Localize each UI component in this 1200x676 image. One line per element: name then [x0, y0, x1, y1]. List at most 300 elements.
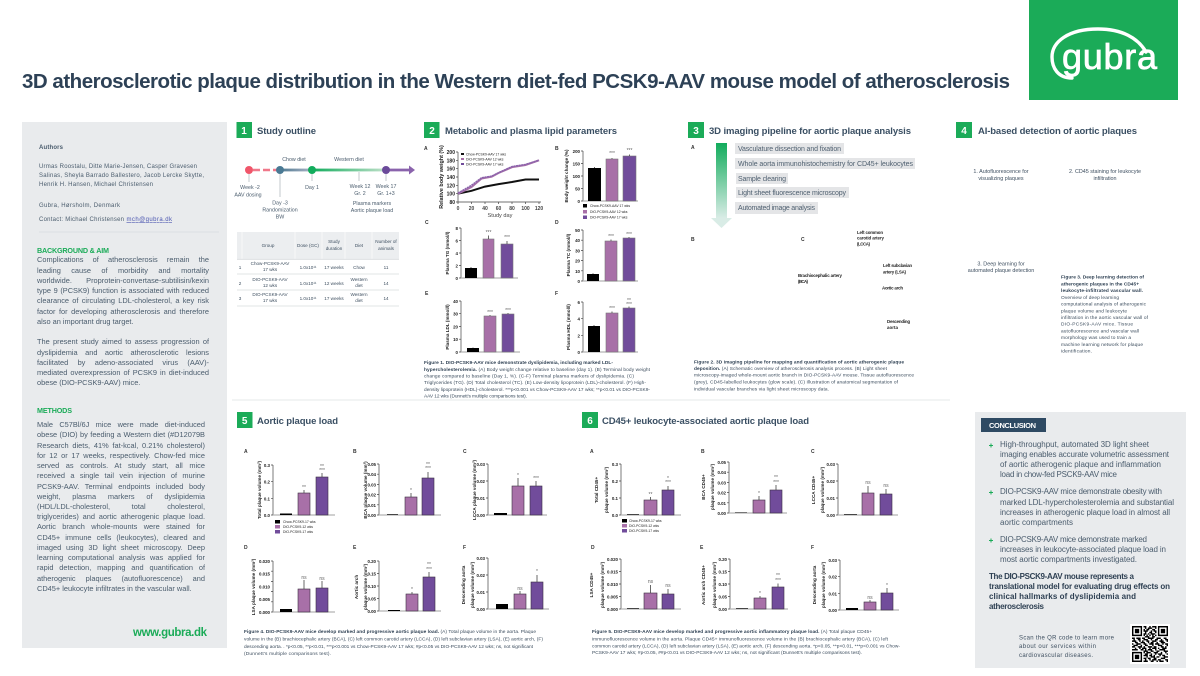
anatomical labels: (BCA) [798, 279, 809, 284]
text: methods: triglycerides) and aortic atherogenic plaque load. [37, 512, 205, 521]
chart A: body weight curve: 100 [521, 206, 530, 212]
chart A: body weight curve: Chow-PCSK9-AAV 17 wks [466, 152, 506, 156]
chart 5B: 0.04 [367, 472, 377, 477]
chart 5C: 0.00 [476, 513, 486, 518]
chart 6F: 0.01 [828, 591, 838, 596]
pipeline steps: Vasculature dissection and fixation [738, 146, 841, 153]
chart B: body weight change: *** [627, 148, 632, 154]
panel 5: aortic plaque load [237, 412, 549, 657]
timeline: Week 17 [376, 184, 396, 190]
caption: figure 5 [592, 629, 900, 656]
chart 6F: Descending aorta [812, 565, 817, 604]
caption: figure 5: common carotid artery (LCCA), (D) left subclavian artery (LSA), (E) aortic arch, (F) descending aorta. *p<0.05, **p<0.01, ***p<0.001 vs Chow- [592, 644, 900, 650]
table: study groups: diet [355, 298, 363, 303]
timeline: Gr. 2 [354, 191, 366, 197]
heading 2: Metabolic and plasma lipid parameters [445, 126, 617, 137]
chart 5F: 0.01 [476, 590, 486, 595]
chart C: plasma TG: Plasma TG (mmol/l) [445, 231, 450, 274]
caption: figure 4 [244, 629, 543, 657]
QR call to action: about our services within [1019, 644, 1096, 650]
chart 6F: 0.00 [828, 608, 838, 613]
image labels: 1. Autofluorescence for [973, 169, 1029, 175]
chart 5E: 0.10 [367, 584, 377, 589]
chart 5D: 0.010 [259, 584, 271, 590]
text: methods: obese (DIO) by feeding a Western diet (#D12079B [37, 430, 205, 439]
chart 6D: 0.005 [607, 594, 619, 600]
QR call to action: cardiovascular diseases. [1019, 653, 1093, 659]
chart 6B: *** [773, 480, 779, 486]
website link: www.gubra.dk [132, 627, 208, 639]
chart C: plasma TG: *** [486, 230, 491, 236]
chart 6E: * [759, 591, 761, 597]
chart 5F: * [536, 569, 538, 575]
arrow: pipeline direction [711, 143, 732, 228]
chart 5E: plaque volume (mm³) [363, 563, 368, 610]
heading: background and aim: BACKGROUND & AIM [37, 246, 109, 255]
panel 3: 3D imaging pipeline [688, 122, 915, 392]
text: background: clearance of circulating LDL-cholesterol, a key risk [37, 296, 209, 305]
image labels: visualizing plaques [978, 176, 1024, 182]
chart 6A: 0.3 [612, 462, 619, 467]
chart 6A: Total CD45+ [594, 477, 599, 503]
chart 6B: 0.01 [717, 501, 727, 506]
image labels: automated plaque detection [968, 268, 1034, 274]
chart 6E: Aortic arch CD45+ [701, 565, 706, 605]
chart 6A [590, 449, 681, 533]
chart 6F: ns [867, 595, 873, 601]
caption: figure 3: DIO-PCSK9-AAV mice. Tissue [1061, 322, 1133, 328]
pipeline steps [735, 143, 915, 214]
text: background: dyslipidemia and aortic atherosclerotic lesions [37, 348, 209, 357]
chart B: body weight change [555, 146, 638, 220]
panel: conclusion [975, 412, 1186, 668]
timeline: Chow diet [282, 157, 306, 163]
chart 6F: F [811, 545, 814, 551]
chart 5B: ** [426, 462, 430, 468]
chart D: plasma TC: 10 [575, 269, 581, 274]
anatomical labels: (LCCA) [857, 242, 871, 246]
caption: figure 3: leukocyte-infiltrated vascular wall. [1061, 288, 1143, 294]
chart F: plasma HDL [555, 291, 638, 355]
chart 5B: BCA plaque volume (mm³) [363, 461, 368, 519]
text: background: type 9 (PCSK9) function is associated with reduced [37, 286, 209, 295]
chart 6B [701, 449, 787, 516]
chart D: plasma TC [555, 220, 638, 284]
chart 5F: 0.02 [476, 573, 486, 578]
chart 5E [353, 545, 441, 614]
chart 6C: ns [883, 483, 889, 489]
chart 6A: ** [649, 492, 652, 498]
chart 5F: plaque volume (mm³) [470, 561, 475, 608]
chart 5A: 0.0 [264, 513, 271, 518]
chart 5D: 0.000 [259, 610, 271, 615]
chart 6C [811, 449, 898, 518]
chart A: body weight curve: 100 [447, 192, 455, 198]
caption: figure 2: Figure 2. 3D imaging pipeline for mapping and quantification of aortic atherogenic plaque [694, 360, 904, 366]
chart 6B: plaque volume (mm³) [710, 463, 715, 510]
panel 3: 3D imaging pipeline: B [691, 237, 695, 243]
heading 2 [424, 122, 617, 138]
authors block [39, 145, 204, 223]
chart 6C: 0.03 [826, 462, 836, 467]
chart 5B [353, 449, 441, 519]
chart F: plasma HDL: 4 [578, 317, 581, 322]
caption: figure 5: PCSK9-AAV 17 wks; #p<0.05, ##p<0.01 vs DIO-PCSK9-AAV 12 wks; ns, not significant (Dunnett's multiple comparisons test). [592, 650, 862, 656]
chart 5A: ** [302, 485, 306, 491]
chart E: plasma LDL: 30 [453, 312, 459, 317]
chart 6C: ns [865, 480, 871, 486]
chart 6D: 0.015 [607, 570, 619, 574]
chart C: plasma TG [425, 220, 518, 281]
caption: figure 4: (Dunnett's multiple comparisons test). [244, 651, 331, 657]
chart 6A: Chow-PCSK9-17 wks [629, 519, 662, 523]
anatomical labels: Brachiocephalic artery [798, 273, 843, 278]
caption: figure 4: Figure 4. DIO-PCSK9-AAV mice develop marked and progressive aortic plaque load. (A) Total plaque volume in the aorta. Plaque [244, 629, 536, 635]
text: methods: CD45+ leukocyte infiltrates in the vascular wall. [37, 584, 192, 593]
chart 6E [700, 545, 788, 612]
table: study groups: 2 [239, 281, 242, 286]
chart 6C: 0.02 [826, 479, 836, 484]
bullet 1 [989, 440, 1170, 479]
pipeline steps: Automated image analysis [738, 205, 816, 212]
timeline: Week 12 [350, 184, 370, 190]
chart 5E: 0.15 [367, 572, 377, 576]
caption: figure 3 [1061, 275, 1149, 354]
chart 5A: 0.3 [264, 463, 271, 468]
chart 5A: *** [319, 468, 325, 474]
chart 6B: 0.05 [717, 460, 727, 465]
panel: left sidebar [22, 122, 227, 648]
anatomical labels: Left common [857, 230, 883, 235]
timeline: Day 1 [305, 185, 319, 191]
chart 6B: B [701, 449, 705, 455]
chart B: body weight change: 0 [578, 199, 581, 204]
text: methods: atherogenic plaques (autofluorescence) and [37, 574, 205, 583]
chart 5F: ns [517, 586, 523, 592]
chart 6A: * [667, 476, 669, 482]
chart A: body weight curve: 180 [447, 158, 455, 164]
chart E: plasma LDL: *** [487, 310, 493, 316]
text: methods: served as controls. At study start, all mice [37, 461, 205, 470]
timeline: Day -3 [272, 200, 288, 206]
chart 5A: Chow-PCSK9-17 wks [283, 520, 316, 524]
chart C: plasma TG: 6 [456, 238, 459, 244]
chart E: plasma LDL: 10 [453, 337, 459, 342]
caption: figure 2: microscopy-imaged whole-mount aortic branch in DIO-PCSK9-AAV mouse. Tissue autofluorescence [694, 372, 914, 378]
table: study groups [237, 232, 399, 306]
table: study groups: Western [350, 292, 368, 297]
text: methods: for 12 or 17 weeks, respectively. Chow-fed mice [37, 451, 205, 460]
chart F: plasma HDL: ** [627, 298, 631, 304]
pipeline steps: Whole aorta immunohistochemistry for CD45+ leukocytes [738, 161, 914, 168]
title: 3D atherosclerotic plaque distribution in the Western diet-fed PCSK9-AAV mouse model of atherosclerosis [22, 70, 1010, 93]
chart D: plasma TC: 0 [578, 279, 581, 284]
chart F: plasma HDL: *** [626, 302, 632, 308]
table: study groups: Group [262, 243, 275, 248]
text: methods: rapid detection, mapping and quantification of [37, 563, 205, 572]
table: study groups: DIO-PCSK9-AAV [252, 277, 288, 282]
caption: figure 3: morphology was used to train a [1061, 335, 1131, 341]
chart F: plasma HDL: 6 [578, 300, 581, 305]
heading 5: 5 [242, 416, 248, 427]
chart 6D: LSA CD45+ [589, 572, 594, 597]
chart 5E: *** [426, 567, 432, 573]
anatomical labels: Descending [887, 319, 910, 324]
chart 5D [244, 545, 335, 615]
chart A: body weight curve: 80 [449, 200, 455, 206]
caption: figure 3: infiltration in the aortic vascular wall of [1061, 315, 1149, 321]
chart F: plasma HDL: 0 [578, 350, 581, 355]
chart 5E: E [353, 545, 357, 551]
chart 5B: 0.03 [367, 482, 377, 487]
chart 6B: 0.02 [717, 491, 727, 496]
chart 5A: Total plaque volume (mm³) [257, 460, 262, 519]
chart D: plasma TC: D [555, 220, 559, 226]
text: methods: received a single tail vein injection of murine [37, 471, 205, 480]
bullet 3: increases in leukocyte-associated plaque load in [1000, 545, 1166, 554]
anatomical labels: Left subclavian [883, 263, 912, 268]
chart B: body weight change: DIO-PCSK9-AAV 12 wks [590, 210, 628, 214]
chart B: body weight change: B [555, 146, 559, 152]
chart 6F [811, 545, 899, 613]
anatomical labels [798, 230, 912, 330]
chart 6E: ** [776, 573, 780, 579]
chart A: body weight curve: 140 [447, 175, 455, 181]
panel 3: 3D imaging pipeline: C [801, 237, 805, 243]
chart A: body weight curve [424, 145, 543, 219]
table: study groups: 11 [384, 265, 389, 270]
image labels: 2. CD45 staining for leukocyte [1069, 169, 1141, 175]
table: study groups: 12 wks [263, 283, 278, 288]
image labels: 3. Deep learning for [977, 262, 1025, 268]
chart 6E: 0.10 [718, 582, 728, 587]
chart E: plasma LDL: 20 [453, 324, 459, 330]
chart D: plasma TC: *** [626, 232, 632, 238]
table: study groups: 14 [383, 296, 389, 301]
chart 6C: C [811, 449, 815, 455]
chart 5E: 0.00 [367, 609, 377, 614]
table: study groups: 14 [383, 281, 389, 286]
chart 5F [461, 545, 549, 612]
chart 6E: *** [775, 578, 781, 584]
heading 6 [582, 412, 809, 428]
chart 5E: ** [427, 562, 431, 568]
chart A: body weight curve: 20 [469, 206, 474, 212]
bullet 1: High-throughput, automated 3D light sheet [1000, 440, 1150, 449]
chart 5C: C [463, 449, 467, 455]
chart 5C: 0.01 [476, 496, 486, 501]
chart 6E: plaque volume (mm³) [712, 561, 717, 608]
chart A: body weight curve: 0 [457, 206, 460, 212]
table: study groups: Diet [355, 243, 364, 248]
chart 6E: E [700, 545, 704, 551]
chart 5A: DIO-PCSK9-17 wks [283, 530, 313, 534]
conclusion statement: translational model for evaluating drug effects on [989, 582, 1170, 591]
caption: figure 4: descending aorta. . *p<0.05, **p<0.01, ***p<0.001 vs Chow-PCSK9-AAV 17 wks; #p<0.05 vs DIO-PCSK9-AAV 12 wks; ns, not significant [244, 644, 534, 650]
chart C: plasma TG: 0 [456, 276, 459, 281]
heading 5: Aortic plaque load [257, 416, 338, 427]
chart 5B: 0.02 [367, 493, 377, 498]
table: study groups: 17 weeks [324, 265, 344, 270]
text: methods: Research diets, 41% fat-kcal, 0.21% cholesterol) [37, 441, 205, 450]
chart 6C: plaque volume (mm³) [820, 466, 825, 513]
caption: figure 3: identification. [1061, 348, 1092, 354]
chart 6A: A [590, 449, 594, 455]
heading 6: CD45+ leukocyte-associated aortic plaque load [602, 416, 809, 427]
chart 6E: 0.20 [718, 557, 728, 562]
QR call to action [1019, 636, 1115, 659]
table: study groups: 1 [239, 265, 242, 270]
pipeline steps: Light sheet fluorescence microscopy [738, 190, 846, 197]
anatomical labels: artery (LSA) [883, 270, 907, 274]
chart F: plasma HDL: F [555, 291, 558, 297]
table: study groups: 1.0x10¹¹ [300, 265, 317, 270]
chart A: body weight curve: 60 [496, 206, 501, 212]
chart E: plasma LDL: 0 [456, 350, 459, 355]
chart 6A: plaque volume (mm³) [604, 466, 609, 513]
caption: figure 5: immunofluorescence volume in the aorta. Plaque CD45+ immunofluorescence volume in the (B) brachiocephalic artery (BCA), (C) left [592, 636, 889, 642]
chart 6E: 0.00 [718, 607, 728, 612]
chart 6F: 0.02 [828, 575, 838, 580]
heading 5 [237, 412, 338, 428]
table: study groups: Study [328, 239, 341, 244]
heading 4 [956, 122, 1137, 138]
table: study groups: animals [378, 246, 395, 251]
chart B: body weight change: Chow-PCSK9-AAV 17 wks [590, 204, 630, 208]
panel 4: AI-based detection [956, 122, 1149, 354]
heading 1: Study outline [257, 126, 316, 137]
chart E: plasma LDL: E [425, 291, 429, 297]
caption: figure 4: volume in the (B) brachiocephalic artery (BCA), (C) left common carotid artery (LCCA), (D) left subclavian artery (LSA), (E) aortic arch, (F) [244, 636, 543, 642]
anatomical labels: carotid artery [857, 236, 885, 240]
chart 6D: ns [665, 583, 671, 589]
text: methods: Aortic branch whole-mounts were stained for [37, 522, 205, 531]
timeline: AAV dosing [234, 192, 262, 198]
authors block: Urmas Roostalu, Ditte Marie-Jensen, Casper Gravesen [39, 164, 197, 170]
chart D: plasma TC: 50 [575, 228, 581, 233]
table: study groups: 1.0x10¹¹ [300, 281, 317, 286]
chart F: plasma HDL: *** [609, 306, 615, 312]
anatomical labels: Aortic arch [882, 286, 903, 290]
caption: figure 1: Triglycerides (TG). (D) Total cholesterol (TC). (E) Low-density lipoprotein (LDL)-cholesterol. (F) High- [424, 380, 646, 386]
timeline: Western diet [334, 157, 364, 163]
chart 6C: 0.00 [826, 513, 836, 518]
text: background: obese (DIO-PCSK9-AAV) mice. [37, 378, 140, 387]
table: study groups: duration [326, 246, 343, 251]
caption: figure 2: (grey), CD45-labelled leukocytes (glow scale). (C) Illustration of anatomical segmentation of [694, 380, 899, 386]
table: study groups: Chow [353, 265, 366, 270]
chart F: plasma HDL: 2 [578, 333, 581, 338]
chart C: plasma TG: 4 [456, 251, 459, 256]
chart B: body weight change: 50 [575, 186, 581, 192]
caption: figure 2: individual vascular branches via light sheet microscopy data. [694, 386, 829, 392]
heading 2: 2 [429, 126, 435, 137]
chart 5D: 0.020 [259, 559, 271, 564]
chart 6B: ** [774, 475, 778, 481]
heading 3: 3 [693, 126, 699, 137]
chart 5E: Aortic arch [354, 575, 359, 599]
timeline: Aortic plaque load [351, 208, 393, 214]
chart D: plasma TC: 30 [575, 248, 581, 253]
panel 3: 3D imaging pipeline: A [691, 145, 695, 151]
caption: figure 1: density lipoprotein (HDL)-cholesterol. ***p<0.001 vs Chow-PCSK9-AAV 17 wks; **p<0.01 vs DIO-PCSK9- [424, 387, 650, 393]
caption: figure 3: Figure 3. Deep learning detection of [1061, 275, 1144, 281]
chart 6F: * [886, 583, 888, 589]
chart A: body weight curve: A [424, 146, 428, 152]
chart 5C: 0.03 [476, 462, 486, 467]
chart 5A [244, 449, 335, 534]
conclusion statement: clinical hallmarks of dyslipidemia and [989, 592, 1136, 601]
timeline: BW [276, 214, 284, 220]
bullet 2: aortic compartments [1000, 518, 1073, 527]
chart 5E: 0.20 [367, 559, 377, 564]
chart 6B: 0.00 [717, 511, 727, 516]
chart A: body weight curve: DIO-PCSK9-AAV 12 wks [466, 158, 504, 162]
chart 5B: * [410, 488, 412, 494]
chart 6F: 0.03 [828, 558, 838, 563]
chart 6A: 0.1 [612, 496, 619, 501]
caption: figure 3: plaque volume and leukocyte [1061, 308, 1127, 314]
caption: figure 3: autofluorescence and vascular wall [1061, 328, 1139, 334]
text: background: also an important drug target. [37, 317, 134, 326]
table: study groups: 3 [239, 296, 242, 301]
chart 6A: DIO-PCSK9-17 wks [629, 529, 659, 533]
table: study groups: 17 weeks [324, 296, 344, 301]
icon: QR code [1130, 624, 1170, 664]
chart 6D: D [591, 545, 595, 551]
chart 6B: * [758, 491, 760, 497]
timeline: Plasma markers [353, 201, 391, 207]
chart 5A: DIO-PCSK9-12 wks [283, 525, 313, 529]
chart 6B: BCA CD45+ [701, 474, 706, 500]
chart A: body weight curve: 120 [535, 206, 543, 212]
chart D: plasma TC: 20 [575, 259, 581, 264]
text: background: worldwide. Proprotein-convertase-subtilisin/kexin [37, 276, 209, 285]
chart 5B: 0.05 [367, 462, 377, 467]
chart E: plasma LDL: Plasma LDL (mmol/l) [445, 304, 450, 350]
text: methods: PCSK9-AAV. Terminal endpoints included body [37, 482, 205, 491]
chart B: body weight change: *** [609, 151, 615, 157]
text: background: The present study aimed to assess progression of [37, 337, 209, 346]
chart 6D [589, 545, 681, 612]
caption: figure 1: AAV 12 wks (Dunnett's multiple comparisons test). [424, 394, 527, 400]
text: methods: Male C57Bl/6J mice were made diet-induced [37, 420, 205, 429]
chart A: body weight curve: 200 [447, 150, 455, 156]
timeline [234, 157, 415, 220]
bullet 2 [989, 487, 1174, 527]
timeline: Randomization [262, 208, 298, 214]
table: study groups: diet [355, 283, 363, 288]
bullet 1: load in chow-fed PSCK9-AAV mice [1000, 470, 1118, 479]
chart 5A: 0.2 [264, 480, 271, 485]
conclusion tag: CONCLUSION [989, 421, 1036, 430]
authors block: Henrik H. Hansen, Michael Christensen [39, 182, 153, 188]
chart 6B: 0.04 [717, 470, 727, 475]
logo: gubra [1029, 0, 1178, 100]
chart 6A: *** [665, 480, 671, 486]
chart C: plasma TG: C [425, 220, 429, 226]
conclusion tag [981, 418, 1046, 432]
chart 6C: LCCA CD45+ [811, 476, 816, 504]
chart 5C: * [517, 473, 519, 479]
chart 6A: DIO-PCSK9-12 wks [629, 524, 659, 528]
caption: figure 1: hypercholesterolemia. (A) Body weight change relative to baseline (day 1). (B) Terminal body weight [424, 367, 651, 373]
table: study groups: Number of [375, 239, 397, 244]
bullet 1: imaging enables accurate volumetric assessment [1000, 450, 1170, 459]
text: methods: CD45+ immune cells (leukocytes), cleared and [37, 533, 205, 542]
heading 3 [688, 122, 911, 138]
chart E: plasma LDL [425, 291, 520, 355]
